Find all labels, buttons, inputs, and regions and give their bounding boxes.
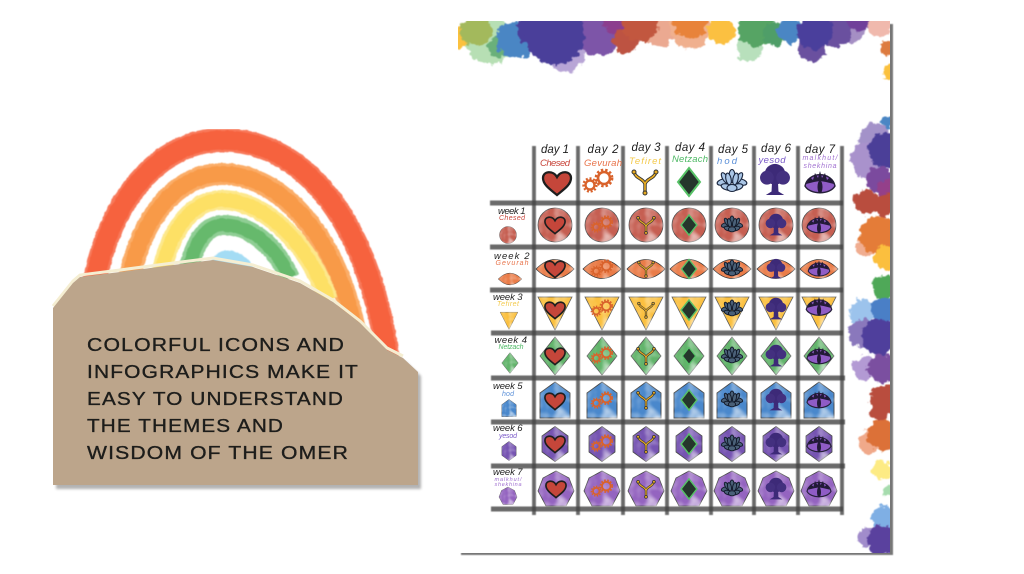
header: day 1 Chesed xyxy=(540,144,571,195)
icon matrix: week 6 xyxy=(542,426,832,462)
header: day 7 Malkhut/Shekhina: day 7 xyxy=(805,144,836,156)
header: day 7 Malkhut/Shekhina: malkhut/ xyxy=(802,155,839,162)
week 3 label: week 3 xyxy=(493,292,523,303)
orange arc xyxy=(128,174,355,330)
header: day 7 Malkhut/Shekhina: shekhina xyxy=(804,163,837,170)
week 3 label: Tefiret xyxy=(497,301,520,308)
rainbow illustration xyxy=(93,140,388,360)
green arc xyxy=(188,225,290,278)
header: day 3 Tefiret: Tefiret xyxy=(629,156,661,167)
week 2 label: Gevurah xyxy=(496,260,529,267)
week 6 label: week 6 xyxy=(493,423,523,434)
week 2 label xyxy=(494,251,530,285)
column headers xyxy=(540,142,839,196)
header: day 2 Gevurah: day 2 xyxy=(588,144,619,156)
week 1 label: week 1 xyxy=(498,206,526,217)
week 7 label: shekhina xyxy=(494,482,522,488)
caption text xyxy=(87,334,359,463)
header: day 6 yesod: yesod xyxy=(758,155,786,166)
week 1 label xyxy=(498,206,526,244)
week 6 label xyxy=(493,423,523,461)
chart page xyxy=(447,1,902,555)
week 4 label xyxy=(494,335,528,373)
icon matrix: week 4 xyxy=(540,337,834,375)
week 1 label: Chesed xyxy=(499,215,526,222)
header: day 1 Chesed: day 1 xyxy=(541,144,569,156)
header: day 2 Gevurah: Gevurah xyxy=(584,158,622,169)
row labels xyxy=(493,206,530,504)
week 5 label: week 5 xyxy=(493,381,523,392)
week 5 label: hod xyxy=(502,391,515,398)
torn cream edge xyxy=(53,258,403,356)
week 3 label xyxy=(493,292,523,329)
page shadow xyxy=(461,24,893,555)
icon matrix: week 2 xyxy=(536,259,838,279)
header: day 4 Netzach: Netzach xyxy=(672,154,708,165)
header: day 2 Gevurah xyxy=(583,144,622,192)
week 4 label: week 4 xyxy=(494,335,528,346)
header: day 5 hod xyxy=(716,144,749,192)
header: day 5 hod: day 5 xyxy=(718,144,749,156)
header: day 6 yesod xyxy=(758,143,792,195)
yellow arc xyxy=(160,200,328,300)
icon matrix: week 5 xyxy=(540,382,834,418)
week 6 label: yesod xyxy=(498,433,518,440)
caption text: THE THEMES AND xyxy=(87,415,284,436)
watercolor border xyxy=(447,1,902,555)
red arc xyxy=(93,140,388,360)
blue arc xyxy=(208,251,254,270)
header: day 5 hod: hod xyxy=(717,156,738,167)
panel shadow xyxy=(56,264,421,489)
page sheet xyxy=(458,21,890,553)
grid lines xyxy=(490,146,845,515)
week 4 label: Netzach xyxy=(498,344,524,351)
icon matrix: week 7 xyxy=(538,471,837,506)
header: day 7 Malkhut/Shekhina xyxy=(802,144,839,194)
header: day 3 Tefiret: day 3 xyxy=(632,142,661,154)
torn paper panel xyxy=(53,258,421,489)
header: day 4 Netzach: day 4 xyxy=(675,142,705,154)
week 7 label: malkhut/ xyxy=(494,477,522,483)
week 7 label: week 7 xyxy=(493,467,523,478)
header: day 4 Netzach xyxy=(672,142,708,196)
header: day 6 yesod: day 6 xyxy=(761,143,792,155)
week 5 label xyxy=(493,381,523,417)
icon matrix: week 3 xyxy=(538,297,836,330)
header: day 1 Chesed: Chesed xyxy=(540,158,571,169)
caption text: COLORFUL ICONS AND xyxy=(87,334,345,355)
week 7 label xyxy=(493,467,523,504)
brown paper xyxy=(53,260,418,485)
icon matrix: week 1 xyxy=(538,208,836,242)
caption text: WISDOM OF THE OMER xyxy=(87,442,349,463)
caption text: EASY TO UNDERSTAND xyxy=(87,388,344,409)
header: day 3 Tefiret xyxy=(629,142,661,195)
caption text: INFOGRAPHICS MAKE IT xyxy=(87,361,359,382)
week 2 label: week 2 xyxy=(494,251,530,262)
